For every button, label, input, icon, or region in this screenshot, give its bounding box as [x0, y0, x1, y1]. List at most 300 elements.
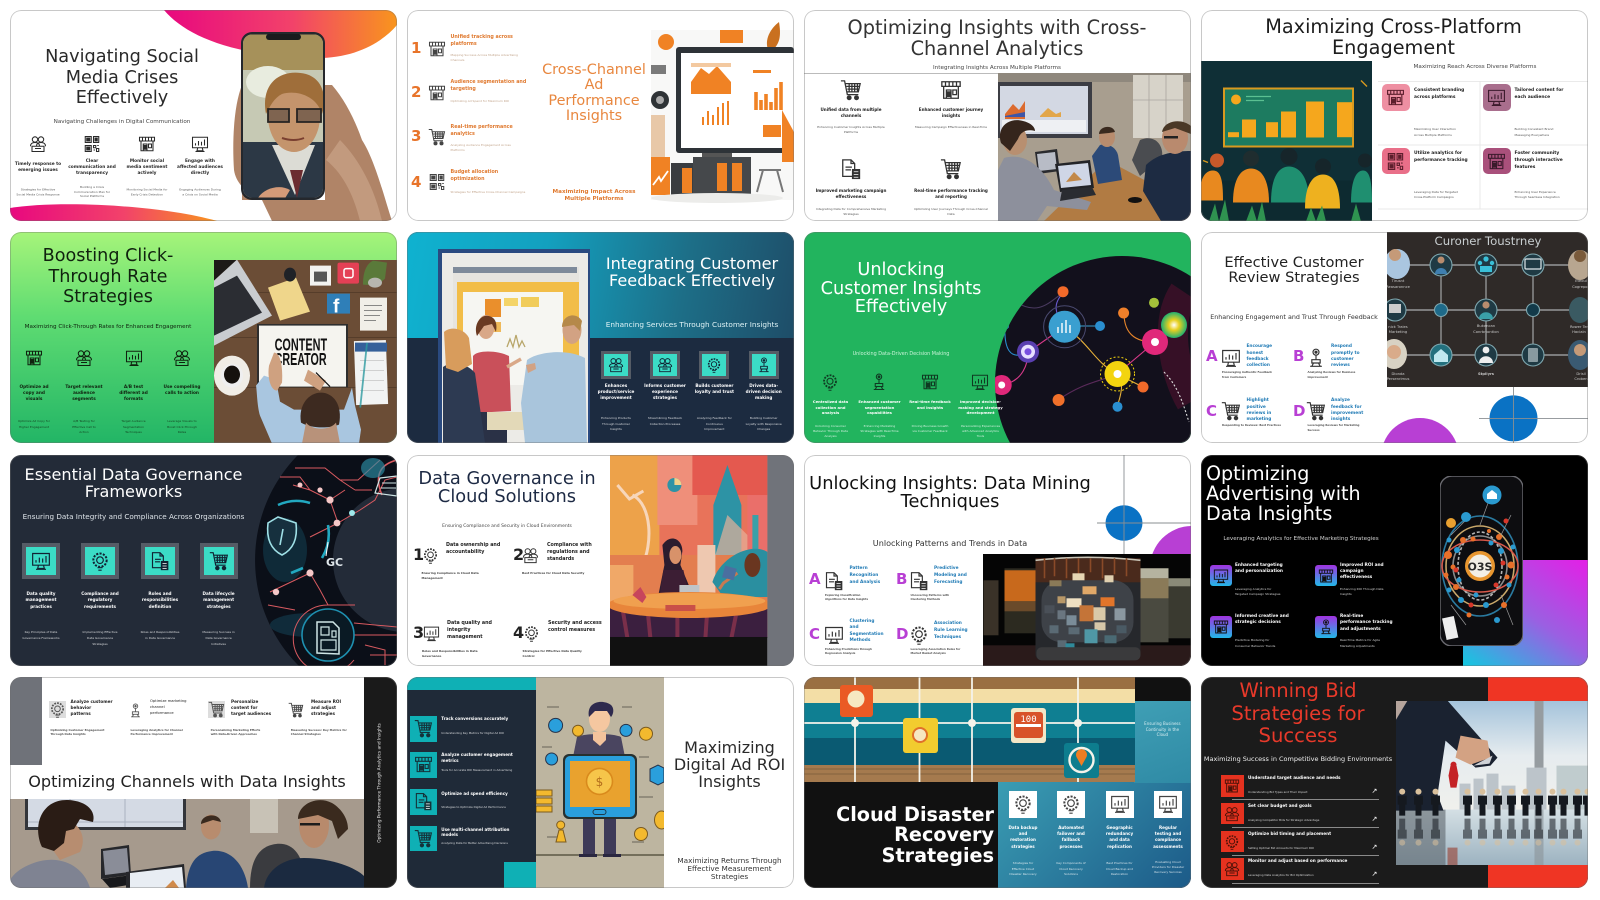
item: monitor and adjust: Leveraging Data Analytics for Bid Optimization: [1248, 873, 1314, 877]
title: Optimizing Channels with Data Insights: [28, 772, 346, 791]
item: centralized data: collection and: [815, 405, 846, 410]
diagram: customer journey network photo: Marketing: [1389, 330, 1407, 334]
title: Maximizing: [684, 738, 775, 757]
item: compliance requirements: requirements: [84, 604, 116, 609]
diagram: customer journey network photo: nick Traies: [1388, 325, 1408, 329]
item 1: unified tracking: [411, 34, 518, 62]
item C: clustering: Segmentation: [850, 632, 884, 637]
item B: predictive modeling: Modeling and: [934, 573, 967, 578]
item: centralized data: Behavior Through Data: [813, 429, 848, 433]
image: hand holding phone: [233, 32, 392, 221]
subtitle: Maximizing Returns Through: [677, 856, 782, 865]
item C: highlight positive reviews: C: [1206, 402, 1217, 420]
title: Strategies: [882, 844, 994, 867]
item 3: data quality: integrity: [447, 628, 470, 633]
panel: Maximizing Cross-Platform Engagement: [1201, 10, 1588, 221]
item C: clustering: C: [809, 625, 820, 643]
item: data-driven decisions: Drives data-: [749, 383, 778, 388]
item: real-time feedback: and insights: [917, 405, 943, 410]
item: utilize analytics: Utilize analytics for: [1414, 151, 1462, 156]
subtitle: Enhancing Services Through Customer Insights: [606, 320, 778, 329]
side strip with rotated caption: Optimizing Performance Through Analytics and Insights: [378, 724, 382, 843]
item: ad spend: [410, 789, 530, 815]
item: personalize content: content for: [231, 705, 257, 710]
title: [1231, 680, 1365, 748]
item 2: audience segmentation: [411, 79, 526, 103]
item 4: security controls: 4: [513, 623, 524, 642]
subtitle: Ensuring Data Integrity and Compliance Across Organizations: [23, 512, 244, 521]
item: budget and goals: Analyzing Competitor Bids for Strategic Advantage: [1248, 818, 1319, 822]
illustration: cyber ring with shield: GC: [326, 556, 343, 569]
subtitle: Integrating Insights Across Multiple Platforms: [933, 64, 1061, 70]
item D: association rules: D: [896, 625, 908, 643]
diagram: customer journey network photo: Drisil: [1576, 372, 1586, 376]
title: [809, 475, 1091, 512]
item: customer segmentation: [857, 373, 902, 439]
item: failover and fallback: fallback: [1062, 837, 1080, 842]
item 4: budget allocation: Budget allocation: [450, 170, 498, 175]
title: Integrating Customer: [606, 254, 778, 273]
item: targeting: and personalization: [1235, 569, 1283, 574]
item 1: unified tracking: Mapping Success Across Multiple Advertising: [450, 53, 518, 57]
item A: pattern recognition: Pattern: [850, 566, 868, 571]
item: tailored content: Messaging Everywhere: [1514, 133, 1549, 137]
item 3: data quality: [413, 621, 508, 661]
item A: encourage feedback: collection: [1246, 363, 1270, 368]
item: testing and compliance: Recovery Services: [1154, 870, 1182, 874]
title: [1206, 464, 1361, 524]
item: customer segmentation: segmentation: [865, 405, 894, 410]
item: track conversions: [410, 716, 530, 742]
title: Performance: [548, 93, 640, 109]
item D: analyze feedback: insights: [1331, 417, 1350, 422]
title: Strategies for: [1231, 702, 1365, 725]
title: Success: [1259, 724, 1337, 747]
diagram: customer journey network photo: Croben: [1574, 377, 1588, 381]
illustration: phone with SEO network: O3S: [1468, 560, 1493, 574]
item: decision making: [958, 373, 1003, 439]
item A: encourage feedback: feedback: [1246, 357, 1269, 362]
item: engagement metrics: Tools for Accurate ROI Measurement in Advertising: [441, 768, 512, 772]
item: customer journey: Enhanced customer journey: [919, 107, 983, 112]
title: Review Strategies: [1228, 269, 1360, 286]
item 1: data ownership: Management: [422, 576, 443, 580]
item: customer journey: Measuring Campaign Effectiveness in Real-Time: [915, 125, 987, 129]
diagram: customer journey network photo: Conrbrtontion: [1473, 330, 1499, 334]
item: optimize ad copy: visuals: [26, 397, 42, 402]
item B: respond promptly: Analyzing Reviews for Business: [1308, 370, 1355, 374]
item: real-time tracking: Data: [947, 212, 955, 216]
item 1: unified tracking: Unified tracking across: [450, 35, 513, 40]
item: utilize analytics: Cross-Platform Campaigns: [1414, 195, 1454, 199]
title: Recovery: [894, 823, 994, 846]
item: monitor sentiment: Monitoring Social Media for: [127, 187, 167, 191]
item: calls to action: Use compelling: [164, 385, 200, 390]
accent: grey block: [10, 677, 42, 765]
subtitle: Navigating Challenges in Digital Communication: [54, 119, 190, 125]
side strip with rotated caption: [364, 677, 397, 888]
item: creative decisions: Informed creative and: [1235, 614, 1289, 619]
title: Data Insights: [1206, 502, 1332, 525]
title: Engagement: [1332, 36, 1455, 59]
item: clear communication: Social Platforms: [80, 194, 104, 198]
item 3: data quality: Roles and Responsibilities in Data: [422, 649, 478, 653]
item: channel performance: Leveraging Analytics for Channel: [130, 728, 183, 732]
subtitle: [553, 189, 636, 202]
panel: Boosting Click-Through Rate Strategies: [10, 232, 397, 443]
item: geographic redundancy: [1098, 791, 1142, 883]
item: channel performance: Optimize marketing: [150, 699, 186, 703]
item D: analyze feedback: improvement: [1331, 411, 1363, 416]
item: channel performance: Performance Improvement: [130, 732, 173, 736]
item: centralized data: Centralized data: [813, 399, 848, 404]
item: testing and compliance: testing and: [1155, 831, 1181, 836]
title: Cloud Solutions: [438, 486, 576, 507]
item: failover and fallback: processes: [1059, 844, 1083, 849]
item: product improvement: Enhances: [605, 383, 627, 388]
item 1: data ownership: Ensuring Compliance in Cloud Data: [422, 571, 479, 575]
item: lifecycle management: strategies: [207, 604, 231, 609]
item: data quality: practices: [30, 604, 52, 609]
item B: predictive modeling: Clustering Methods: [910, 597, 940, 601]
divider: [804, 72, 998, 74]
item D: analyze feedback: Success: [1308, 428, 1320, 432]
item: target audience: segments: [72, 397, 96, 402]
item 4: security controls: control measures: [548, 628, 595, 633]
item: geographic redundancy: redundancy: [1106, 831, 1133, 836]
title: Winning Bid: [1239, 679, 1357, 702]
item A: pattern recognition: and Analysis: [850, 580, 880, 585]
item: ROI: Improved ROI and: [1340, 563, 1384, 568]
item: unified data: channels: [841, 113, 861, 118]
item: roles and responsibilities: in Data Governance: [145, 636, 175, 640]
item B: predictive modeling: B: [896, 570, 907, 588]
subtitle: Maximizing Success in Competitive Bidding Environments: [1204, 755, 1392, 763]
item 1: unified tracking: platforms: [450, 42, 477, 47]
item D: association rules: Techniques: [934, 635, 961, 640]
item 1: data ownership: [413, 543, 508, 583]
item 3: real-time analytics: Analyzing Audience Engagement Across: [450, 143, 511, 147]
item: loyalty and trust: Analyzing Feedback for: [697, 416, 732, 420]
illustration: neon data network in circle: [995, 256, 1191, 443]
item: A/B test: A/B test: [124, 385, 143, 390]
item: targeting: Leveraging Analytics for: [1235, 587, 1271, 591]
photo: content creator desk: f: [333, 296, 340, 317]
item: data quality: Key Principles of Data: [25, 630, 57, 634]
item: calls to action: calls to action: [165, 391, 199, 396]
item: customer segmentation: Enhancing Marketing: [864, 424, 895, 428]
illustration: infrastructure tiles: [804, 677, 1135, 782]
item: geographic redundancy: and data: [1109, 837, 1130, 842]
subtitle: [677, 857, 782, 881]
item: testing and compliance: Evaluating Cloud: [1155, 860, 1181, 864]
item: foster community: features: [1514, 165, 1535, 170]
panel: Effective Customer Review Strategies: [1201, 232, 1588, 443]
item: marketing campaign effectiveness: [816, 159, 886, 216]
item: bid timing: Optimize bid timing and placement: [1248, 831, 1331, 836]
item: real-time tracking: [1315, 616, 1410, 649]
item: decision making: Tools: [977, 434, 984, 438]
item: foster community: Through Seamless Integration: [1514, 195, 1560, 199]
item: real-time feedback: Real-time feedback: [909, 399, 951, 404]
title: Effective Customer: [1224, 254, 1364, 271]
item: real-time tracking: performance tracking: [1340, 620, 1393, 625]
item: compliance requirements: Data Governance: [87, 636, 113, 640]
item: monitor sentiment: Monitor social: [130, 159, 164, 164]
item B: predictive modeling: Predictive: [934, 566, 959, 571]
item: real-time tracking: Optimizing User Journeys Through Cross-Channel: [914, 207, 988, 211]
item 1: unified tracking: 1: [411, 39, 421, 57]
item: roles and responsibilities: responsibilities: [142, 597, 178, 602]
item A: pattern recognition: A: [809, 570, 821, 588]
item: geographic redundancy: Restoration: [1111, 872, 1128, 876]
item 1: data ownership: 1: [413, 545, 424, 564]
item: loyalty and trust: Continuous: [706, 422, 723, 426]
photo: businessman placing red figure: [1396, 701, 1588, 865]
item: optimize ad copy: copy and: [23, 391, 45, 396]
item: compliance requirements: [75, 542, 125, 658]
item: timely response: Strategies for Effective: [21, 187, 55, 191]
item: ROI: effectiveness: [1340, 575, 1372, 580]
item: optimize ad copy: [18, 350, 50, 428]
item: product improvement: Enhancing Products: [601, 416, 631, 420]
teal header band: [407, 232, 794, 338]
item 3: data quality: Data quality and: [447, 621, 492, 626]
title: Insights: [698, 772, 761, 791]
shape: blue crosshair circle: [1097, 455, 1191, 554]
item C: highlight positive reviews: [1206, 398, 1291, 434]
title: Techniques: [901, 491, 999, 512]
item 1: data ownership: accountability: [446, 550, 484, 555]
item: data quality: management: [25, 597, 57, 602]
item 2: compliance: standards: [547, 557, 574, 562]
panel: Optimizing Advertising with Data Insights: [1201, 455, 1588, 666]
item 3: real-time analytics: Platforms: [450, 148, 465, 152]
item B: respond promptly: B: [1293, 347, 1304, 365]
item: understand audience: Understanding Bid Types and Their Impact: [1248, 790, 1307, 794]
item: clear communication: [68, 136, 116, 198]
item C: clustering: Enhancing Predictions through: [825, 647, 872, 651]
item: real-time feedback: via Customer Feedback: [912, 429, 948, 433]
item: roles and responsibilities: Roles and Responsibilities: [141, 630, 179, 634]
item: loyalty and trust: Builds customer: [695, 383, 733, 388]
item C: highlight positive reviews: marketing: [1246, 417, 1271, 422]
panel: Maximizing Digital Ad ROI Insights: [407, 677, 794, 888]
subtitle: Multiple Platforms: [565, 196, 623, 202]
item: engagement metrics: metrics: [441, 758, 459, 763]
item: track conversions: Track conversions accurately: [441, 716, 508, 721]
item: unified data: Platforms: [844, 130, 858, 134]
item 2: compliance: Best Practices for Cloud Data Security: [522, 571, 584, 575]
diagram: customer journey network photo: Bukancan: [1477, 324, 1496, 328]
item: target audience: Target relevant: [65, 385, 103, 390]
accent: teal top bar: [407, 677, 536, 690]
sidebar background: [407, 677, 536, 888]
item: marketing campaign effectiveness: effectiveness: [836, 194, 866, 199]
item: product improvement: Insights: [610, 427, 622, 431]
item 2: audience segmentation: targeting: [450, 87, 476, 92]
illustration: phone with SEO network: [1440, 476, 1523, 646]
item C: highlight positive reviews: positive: [1246, 404, 1266, 410]
item: A/B test: different ad: [119, 391, 148, 396]
item: creative decisions: [1210, 616, 1305, 649]
item: A/B test: Techniques: [125, 430, 142, 434]
item D: analyze feedback: [1293, 398, 1378, 434]
title: Cloud Disaster: [836, 803, 994, 826]
accent: red top block: [1488, 677, 1588, 701]
item: attribution models: Use multi-channel attribution: [441, 827, 509, 832]
item B: predictive modeling: [896, 566, 981, 602]
item: loyalty and trust: [695, 351, 734, 431]
item: engage audiences: Engage with: [185, 159, 215, 164]
panel: Optimizing Insights with Cross-Channel Analytics: [804, 10, 1191, 221]
item: measure ROI: and adjust: [311, 705, 336, 710]
item: geographic redundancy: Geographic: [1106, 825, 1133, 830]
item A: encourage feedback: A: [1206, 347, 1218, 365]
accent: red bottom block: [1488, 865, 1588, 888]
item: understand audience: Understand target audience and needs: [1248, 775, 1340, 780]
item C: clustering: Clustering: [850, 619, 874, 624]
table grid: [1378, 81, 1588, 210]
item: measure ROI: strategies: [311, 711, 335, 716]
photo: team meeting: [10, 799, 364, 888]
item: clear communication: Building a Crisis: [80, 185, 104, 189]
item: lifecycle management: [194, 542, 244, 658]
item: monitor and adjust: [1221, 858, 1379, 884]
item 1: data ownership: Data ownership and: [446, 543, 500, 548]
item C: highlight positive reviews: Responding to Reviews: Best Practices: [1222, 423, 1281, 427]
title: [1265, 15, 1522, 59]
item: monitor sentiment: media sentiment: [127, 165, 167, 170]
title: Frameworks: [85, 482, 182, 501]
item: backup and restoration: and: [1019, 831, 1027, 836]
diagram: customer journey network photo: Rower Ter: [1570, 325, 1588, 329]
diagram: customer journey network photo: Tirusnt: [1391, 279, 1405, 283]
item: centralized data: Analysis: [824, 434, 837, 438]
panel: Unlocking Customer Insights: [804, 232, 1191, 443]
diagram: customer journey network photo: Dionda: [1391, 372, 1405, 376]
title: Cross-Channel: [542, 62, 646, 78]
title: [25, 466, 242, 500]
item: consistent branding: Consistent branding: [1414, 88, 1464, 93]
item: channel performance: channel: [150, 705, 165, 709]
item: consistent branding: Across Multiple Platforms: [1414, 133, 1452, 137]
item: customer segmentation: Insights: [874, 434, 885, 438]
item C: clustering: [809, 619, 894, 655]
title: Optimizing: [1206, 462, 1309, 485]
item: timely response: [14, 136, 61, 196]
item: A/B test: [119, 350, 148, 434]
item: real-time tracking: Real-Time Metrics for Agile: [1340, 638, 1380, 642]
item: engage audiences: affected audiences: [177, 165, 223, 170]
item: utilize analytics: [1382, 148, 1468, 199]
item: data quality: Governance Frameworks: [22, 636, 60, 640]
item: engage audiences: directly: [191, 171, 209, 176]
item: calls to action: [164, 350, 200, 434]
item: creative decisions: Predictive Modeling for: [1235, 638, 1269, 642]
item D: association rules: Market Basket Analysis: [910, 651, 946, 655]
item: roles and responsibilities: Roles and: [148, 591, 172, 596]
item: ROI: Enhancing ROI Through Data: [1340, 587, 1384, 591]
item A: pattern recognition: [809, 566, 894, 602]
title: Boosting Click-: [43, 246, 173, 266]
item 2: audience segmentation: Audience segmentation and: [450, 80, 526, 85]
item: testing and compliance: compliance: [1155, 837, 1181, 842]
subtitle: Effective Measurement: [687, 864, 772, 873]
item: failover and fallback: Cloud Recovery: [1059, 867, 1083, 871]
item: geographic redundancy: replication: [1107, 844, 1132, 849]
item: personalize content: Personalizing Marketing Efforts: [211, 728, 260, 732]
item: lifecycle management: Measuring Success in: [202, 630, 235, 634]
item: customer journey: insights: [942, 113, 960, 118]
item: bid timing: ↗: [1372, 843, 1377, 851]
item: real-time tracking: and adjustments: [1340, 627, 1381, 632]
subtitle: Leveraging Analytics for Effective Marketing Strategies: [1223, 536, 1379, 542]
panel: Data Governance in Cloud Solutions: [407, 455, 794, 666]
item: understand audience: ↗: [1372, 787, 1377, 795]
item: product improvement: Through Customer: [602, 422, 630, 426]
item: engage audiences: [177, 136, 223, 196]
diagram: customer journey network photo: [1387, 232, 1588, 387]
title: Maximizing Cross-Platform: [1265, 15, 1522, 38]
item: backup and restoration: Disaster Recovery: [1009, 872, 1037, 876]
item: real-time feedback: [908, 373, 952, 439]
item: compliance requirements: Strategies: [92, 642, 108, 646]
item: ad spend: Strategies to Optimize Digital Ad Performance: [441, 805, 506, 809]
subtitle: Maximizing Impact Across: [553, 189, 635, 195]
item 3: real-time analytics: analytics: [450, 132, 475, 137]
item: timely response: Timely response to: [15, 162, 61, 167]
item: monitor sentiment: Early Crisis Detection: [131, 192, 163, 196]
item: data-driven decisions: Loyalty with Responsive: [746, 422, 782, 426]
item: loyalty and trust: Improvement: [704, 427, 724, 431]
item: customer experience: strategies: [653, 395, 677, 400]
title: Media Crises: [66, 68, 178, 88]
item: decision making: Improved decision-: [960, 399, 1001, 404]
item: ad spend: Optimize ad spend efficiency: [441, 791, 508, 796]
title: [804, 805, 994, 866]
item: optimize ad copy: Optimize Ad Copy for: [18, 419, 50, 423]
item 2: compliance: Compliance with: [547, 543, 592, 548]
item: attribution models: models: [441, 832, 458, 837]
title: Effectively: [76, 88, 168, 108]
diagram: customer journey network photo: Hacialn: [1572, 330, 1587, 334]
item: data-driven decisions: [746, 351, 782, 431]
item 4: budget allocation: 4: [411, 173, 421, 191]
panel: Cloud Disaster Recovery Strategies: [804, 677, 1191, 888]
item: real-time tracking: Real-time performance tracking: [914, 188, 988, 193]
item 2: audience segmentation: 2: [411, 83, 421, 101]
item: backup and restoration: restoration: [1010, 837, 1036, 842]
item: tailored content: Tailored content for: [1514, 88, 1563, 93]
title: Digital Ad ROI: [674, 755, 785, 774]
item: measure ROI: Channel Strategies: [291, 732, 321, 736]
item: testing and compliance: Regular: [1159, 825, 1177, 830]
item: data quality: Data quality: [26, 591, 56, 596]
item: real-time tracking: Marketing Adjustments: [1340, 644, 1375, 648]
item: centralized data: analysis: [822, 410, 839, 415]
item: real-time tracking: [914, 159, 988, 216]
item: ROI: Insights: [1340, 592, 1352, 596]
item A: pattern recognition: Exploring Classification: [825, 593, 860, 597]
title: [848, 16, 1146, 60]
item: bid timing: Setting Optimal Bid Amounts for Maximum ROI: [1248, 846, 1314, 850]
item: marketing campaign effectiveness: Integrating Data for Comprehensive Marketing: [816, 207, 886, 211]
item: data quality: [16, 542, 66, 658]
decorative gradient: bottom swoosh: [10, 204, 217, 221]
item 4: budget allocation: [411, 169, 526, 194]
item: data-driven decisions: making: [755, 395, 772, 400]
